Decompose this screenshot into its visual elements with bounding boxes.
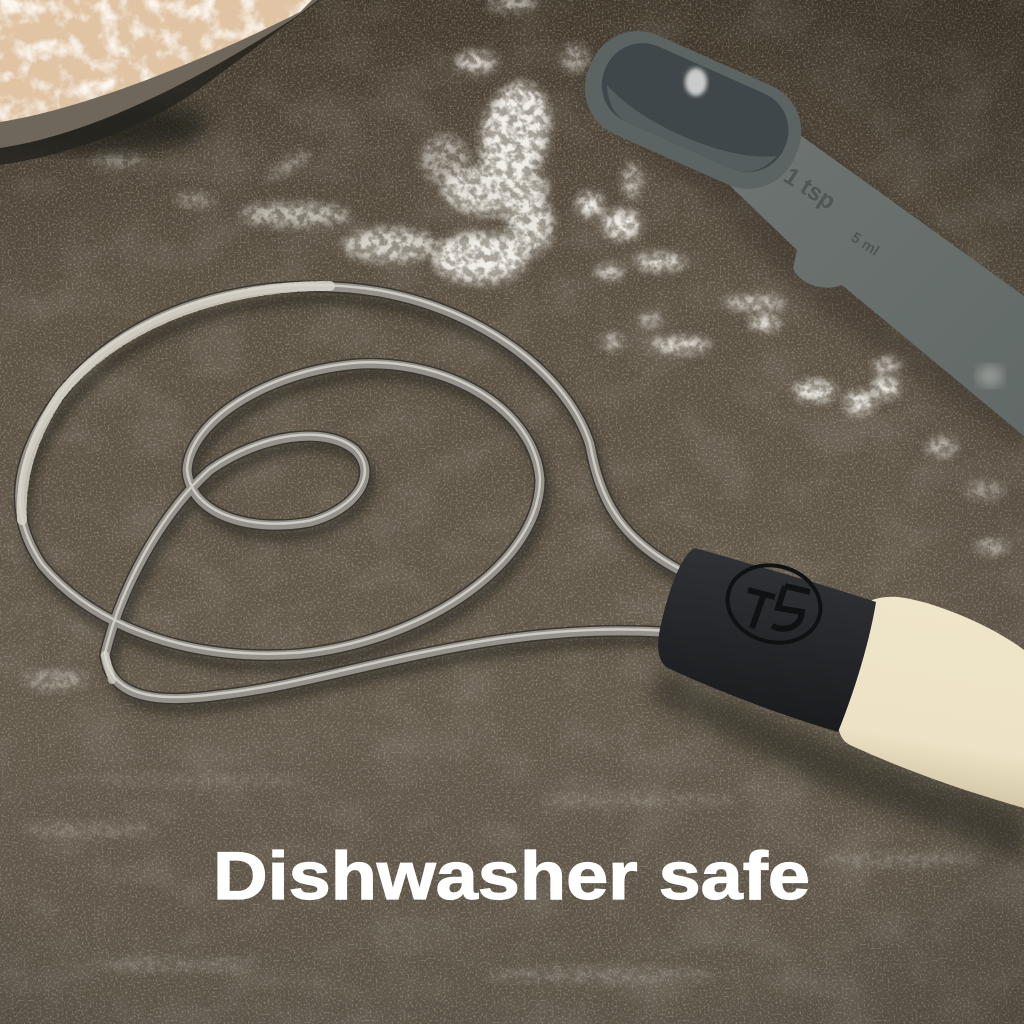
cream wooden handle xyxy=(838,597,1024,808)
measuring spoon: 5 ml xyxy=(848,229,882,260)
spoon embossed label: 1 tsp xyxy=(779,162,840,216)
spoon shadow xyxy=(590,40,1024,450)
collar logo xyxy=(719,555,829,653)
whisk wire xyxy=(20,285,685,699)
title: Dishwasher safe xyxy=(213,838,810,914)
whisk wire shadow xyxy=(25,300,690,709)
measuring spoon xyxy=(569,15,1024,450)
spoon handle xyxy=(722,132,1024,436)
bowl of flour xyxy=(0,0,320,165)
flour dusting on the wire xyxy=(22,286,330,520)
black rubber collar xyxy=(658,548,876,732)
handle shadow xyxy=(650,670,1024,860)
whisk handle xyxy=(650,548,1024,860)
spoon bowl xyxy=(569,15,817,205)
